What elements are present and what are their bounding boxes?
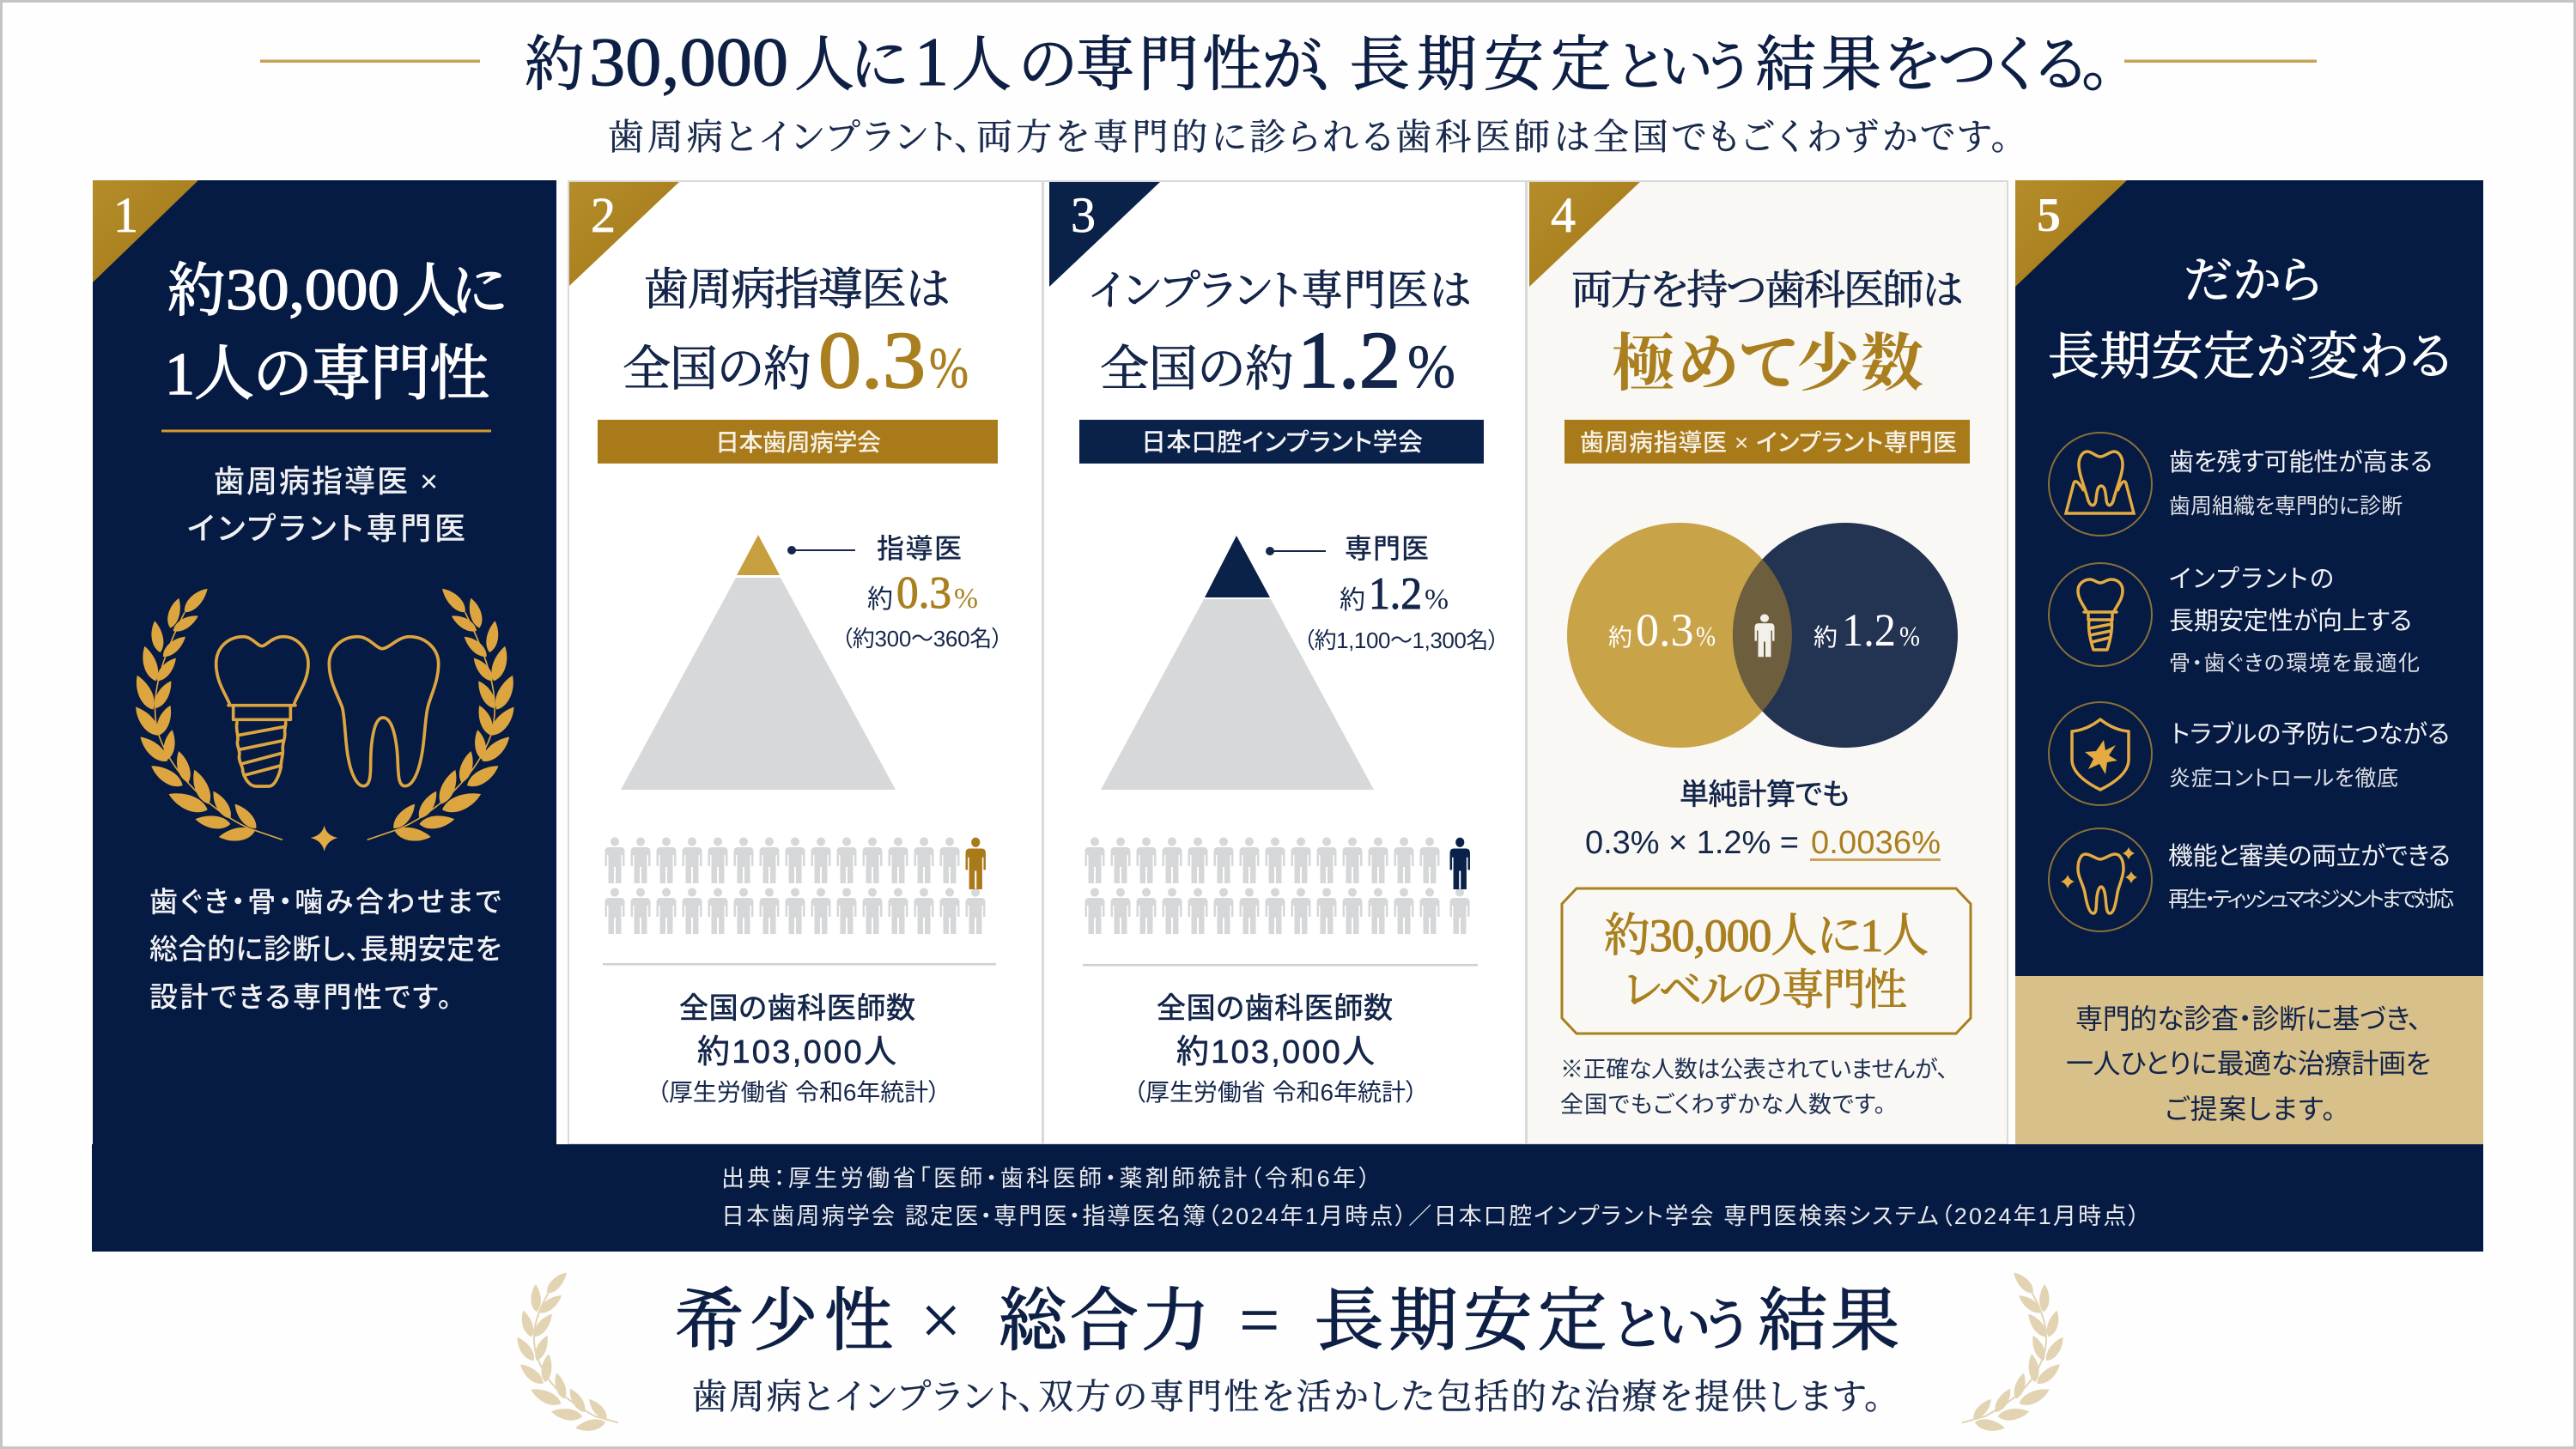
pyramid chart (1101, 533, 1499, 790)
calculation (1585, 779, 1941, 861)
venn diagram: 0.3 (1636, 604, 1693, 656)
panel 1 body text: 歯ぐき・骨・噛み合わせまで (149, 886, 501, 918)
panel 5 callout (2015, 976, 2483, 1144)
badge 3 (1049, 182, 1160, 287)
panel 5: long-term stability (2015, 180, 2483, 1144)
note (1560, 1057, 1948, 1118)
panel 3 heading: 1.2 (1297, 316, 1400, 405)
panel 5 heading: 長期安定が変わる (2048, 329, 2451, 385)
people grid (1085, 838, 1470, 934)
panel 4 heading: 両方を持つ歯科医師は (1571, 268, 1963, 313)
panel 1: 30,000 (93, 180, 556, 1144)
footer message (513, 1269, 2068, 1434)
benefit 3: 炎症コントロールを徹底 (2169, 767, 2398, 791)
title: 約 (525, 33, 585, 99)
title: 人に (794, 33, 908, 99)
venn diagram: % (1696, 621, 1716, 652)
header (260, 25, 2317, 158)
callout (787, 533, 1003, 652)
total dentists (657, 992, 940, 1106)
callout: （約300〜360名） (841, 626, 1003, 652)
note: 全国でもごくわずかな人数です。 (1560, 1092, 1886, 1118)
badge 1: 1 (113, 187, 138, 243)
callout: 30,000: 約30,000人に1人 (1604, 910, 1929, 961)
panel 1 body text: 総合的に診断し、長期安定を (149, 933, 501, 965)
panel 3 heading: インプラント専門医は (1090, 267, 1471, 314)
icon: implant (216, 637, 308, 786)
footer headline: 長期安定 (1315, 1284, 1607, 1360)
panel 3 heading (1090, 267, 1471, 405)
footer headline: という (1614, 1295, 1747, 1356)
icon: shield (2049, 702, 2152, 805)
callout: 0.3 (896, 568, 951, 618)
footer headline (675, 1281, 1899, 1361)
panel 1 body text: 設計できる専門性です。 (149, 981, 452, 1013)
panel 1 heading: 人に (402, 258, 507, 324)
panel 5 callout: ご提案します。 (2165, 1094, 2336, 1125)
panel 1 heading: 約 (167, 258, 226, 324)
panel 1 subheading: 歯周病指導医 × (214, 464, 438, 499)
venn diagram: 約 (1814, 624, 1838, 651)
total dentists: 約103,000人 (1176, 1034, 1375, 1070)
icon: tooth in gum (2049, 433, 2152, 536)
badge 2: 2 (591, 187, 616, 243)
callout (1266, 533, 1499, 653)
panel 1 subheading (187, 464, 465, 546)
rule: title right (2124, 60, 2317, 63)
callout: 約 (1340, 586, 1365, 615)
title: 30,000 (589, 25, 788, 100)
footer subtitle: 歯周病とインプラント、双方の専門性を活かした包括的な治療を提供します。 (692, 1377, 1882, 1416)
title: の (1018, 33, 1078, 99)
title: という (1619, 39, 1747, 97)
callout: 30,000 (1562, 888, 1971, 1034)
panel 1 heading: 30,000 (226, 257, 399, 322)
benefit 2: インプラントの (2169, 566, 2334, 593)
panel 1 heading (165, 257, 507, 408)
callout: （約1,100〜1,300名） (1303, 627, 1499, 653)
panel 2 heading: % (929, 335, 969, 400)
panel 5 callout: 専門的な診査・診断に基づき、 (2075, 1003, 2421, 1034)
title: をつくる。 (1884, 33, 2112, 99)
badge 2 (569, 182, 679, 286)
note: ※正確な人数は公表されていませんが、 (1560, 1057, 1948, 1082)
callout: % (1425, 584, 1449, 615)
total dentists (1133, 992, 1418, 1106)
band: society (598, 420, 998, 464)
badge 1 (93, 180, 198, 282)
band: society (1079, 420, 1484, 464)
panel 4 heading (1571, 268, 1963, 398)
callout: 専門医 (1345, 533, 1429, 564)
subtitle: 歯周病とインプラント、両方を専門的に診られる歯科医師は全国でもごくわずかです。 (608, 118, 2009, 158)
total dentists: 全国の歯科医師数 (679, 992, 915, 1025)
rule: title left (260, 60, 480, 63)
callout: 1.2 (1369, 569, 1422, 619)
benefit 4 (2049, 828, 2454, 931)
title: 専門性 (1075, 33, 1262, 99)
callout: 約 (867, 585, 893, 614)
badge 3: 3 (1071, 187, 1096, 243)
benefit 4: 機能と審美の両立ができる (2168, 842, 2451, 870)
callout: 30,000: レベルの専門性 (1624, 966, 1907, 1014)
panel 1 body text (149, 886, 501, 1013)
benefit 3: トラブルの予防につながる (2171, 720, 2450, 749)
icon: sparkling tooth (2049, 828, 2152, 931)
title: 結果 (1756, 33, 1881, 99)
panel 2 heading (623, 266, 969, 405)
benefit 2: 長期安定性が向上する (2169, 607, 2412, 635)
venn diagram: 約 (1608, 624, 1632, 651)
total dentists: （厚生労働省 令和6年統計） (657, 1079, 940, 1106)
icon: laurel wreath with implant and tooth (131, 585, 519, 852)
panel 2 heading: 0.3 (818, 316, 926, 405)
panel 5 heading (2048, 254, 2451, 385)
panel 2 heading: 全国の約 (623, 343, 811, 397)
calculation: 0.3% × 1.2% = (1585, 825, 1799, 861)
source band: 出典：厚生労働省「医師・歯科医師・薬剤師統計（令和6年） (721, 1166, 1370, 1191)
panel 3 heading: % (1407, 332, 1455, 401)
title (525, 25, 2112, 100)
badge 5 (2015, 180, 2127, 287)
benefit 2 (2049, 563, 2420, 676)
badge 4: 4 (1551, 187, 1576, 243)
benefit 4: 再生・ティッシュマネジメントまで対応 (2168, 888, 2454, 912)
venn diagram: % (1899, 621, 1920, 652)
laurel right (1962, 1269, 2068, 1434)
title: 長期安定 (1350, 33, 1611, 99)
icon: star (311, 826, 337, 852)
footer headline: 総合力 (999, 1284, 1210, 1360)
benefit 1: 歯周組織を専門的に診断 (2169, 494, 2403, 518)
total dentists: 全国の歯科医師数 (1157, 992, 1393, 1025)
callout: 指導医 (877, 533, 962, 564)
icon: tooth (329, 637, 439, 786)
band: society: 日本口腔インプラント学会 (1141, 428, 1423, 457)
band: both (1564, 420, 1970, 464)
total dentists: 約103,000人 (697, 1034, 896, 1070)
panel 5 callout: 一人ひとりに最適な治療計画を (2066, 1048, 2431, 1079)
panel 3: implant (1043, 181, 1526, 1144)
panel 3 heading: 全国の約 (1100, 343, 1294, 397)
title: が、 (1261, 33, 1340, 99)
footer headline: 結果 (1759, 1284, 1899, 1360)
icon: implant (2049, 563, 2152, 666)
panel 2 heading: 歯周病指導医は (644, 266, 950, 315)
panel 1 subheading: インプラント専門医 (187, 511, 465, 546)
total dentists: （厚生労働省 令和6年統計） (1133, 1079, 1418, 1106)
panel 4 heading: 極めて少数 (1612, 329, 1923, 398)
panel 1 heading: 1人の専門性 (165, 342, 489, 408)
band: society: 日本歯周病学会 (715, 429, 881, 456)
source band (92, 1144, 2483, 1252)
panel 4: both (1527, 181, 2008, 1144)
benefit 2: 骨・歯ぐきの環境を最適化 (2169, 652, 2420, 676)
people grid (605, 838, 986, 934)
title: 1 (914, 25, 949, 100)
benefit 1 (2049, 433, 2433, 536)
callout: % (954, 583, 978, 615)
panel 5 heading: だから (2183, 254, 2320, 308)
footer headline: = (1239, 1281, 1279, 1361)
calculation: 0.0036% (1811, 825, 1941, 861)
venn diagram (1567, 523, 1958, 748)
title: 人 (951, 33, 1012, 99)
footer headline: × (920, 1281, 961, 1361)
calculation: 単純計算でも (1680, 779, 1850, 811)
pyramid chart (621, 533, 1003, 790)
badge 4 (1529, 182, 1640, 287)
band: both: 歯周病指導医 × インプラント専門医 (1580, 429, 1957, 456)
laurel left (513, 1269, 618, 1434)
benefit 3 (2049, 702, 2450, 805)
source band: 日本歯周病学会 認定医・専門医・指導医名簿（2024年1月時点）／日本口腔インプラント学会 専門医検索システム（2024年1月時点） (721, 1203, 2140, 1229)
badge 5: 5 (2037, 189, 2061, 242)
panel 2: periodontal (568, 181, 1042, 1144)
benefit 1: 歯を残す可能性が高まる (2169, 448, 2433, 476)
footer headline: 希少性 (675, 1284, 893, 1360)
venn diagram: 1.2 (1842, 604, 1896, 656)
